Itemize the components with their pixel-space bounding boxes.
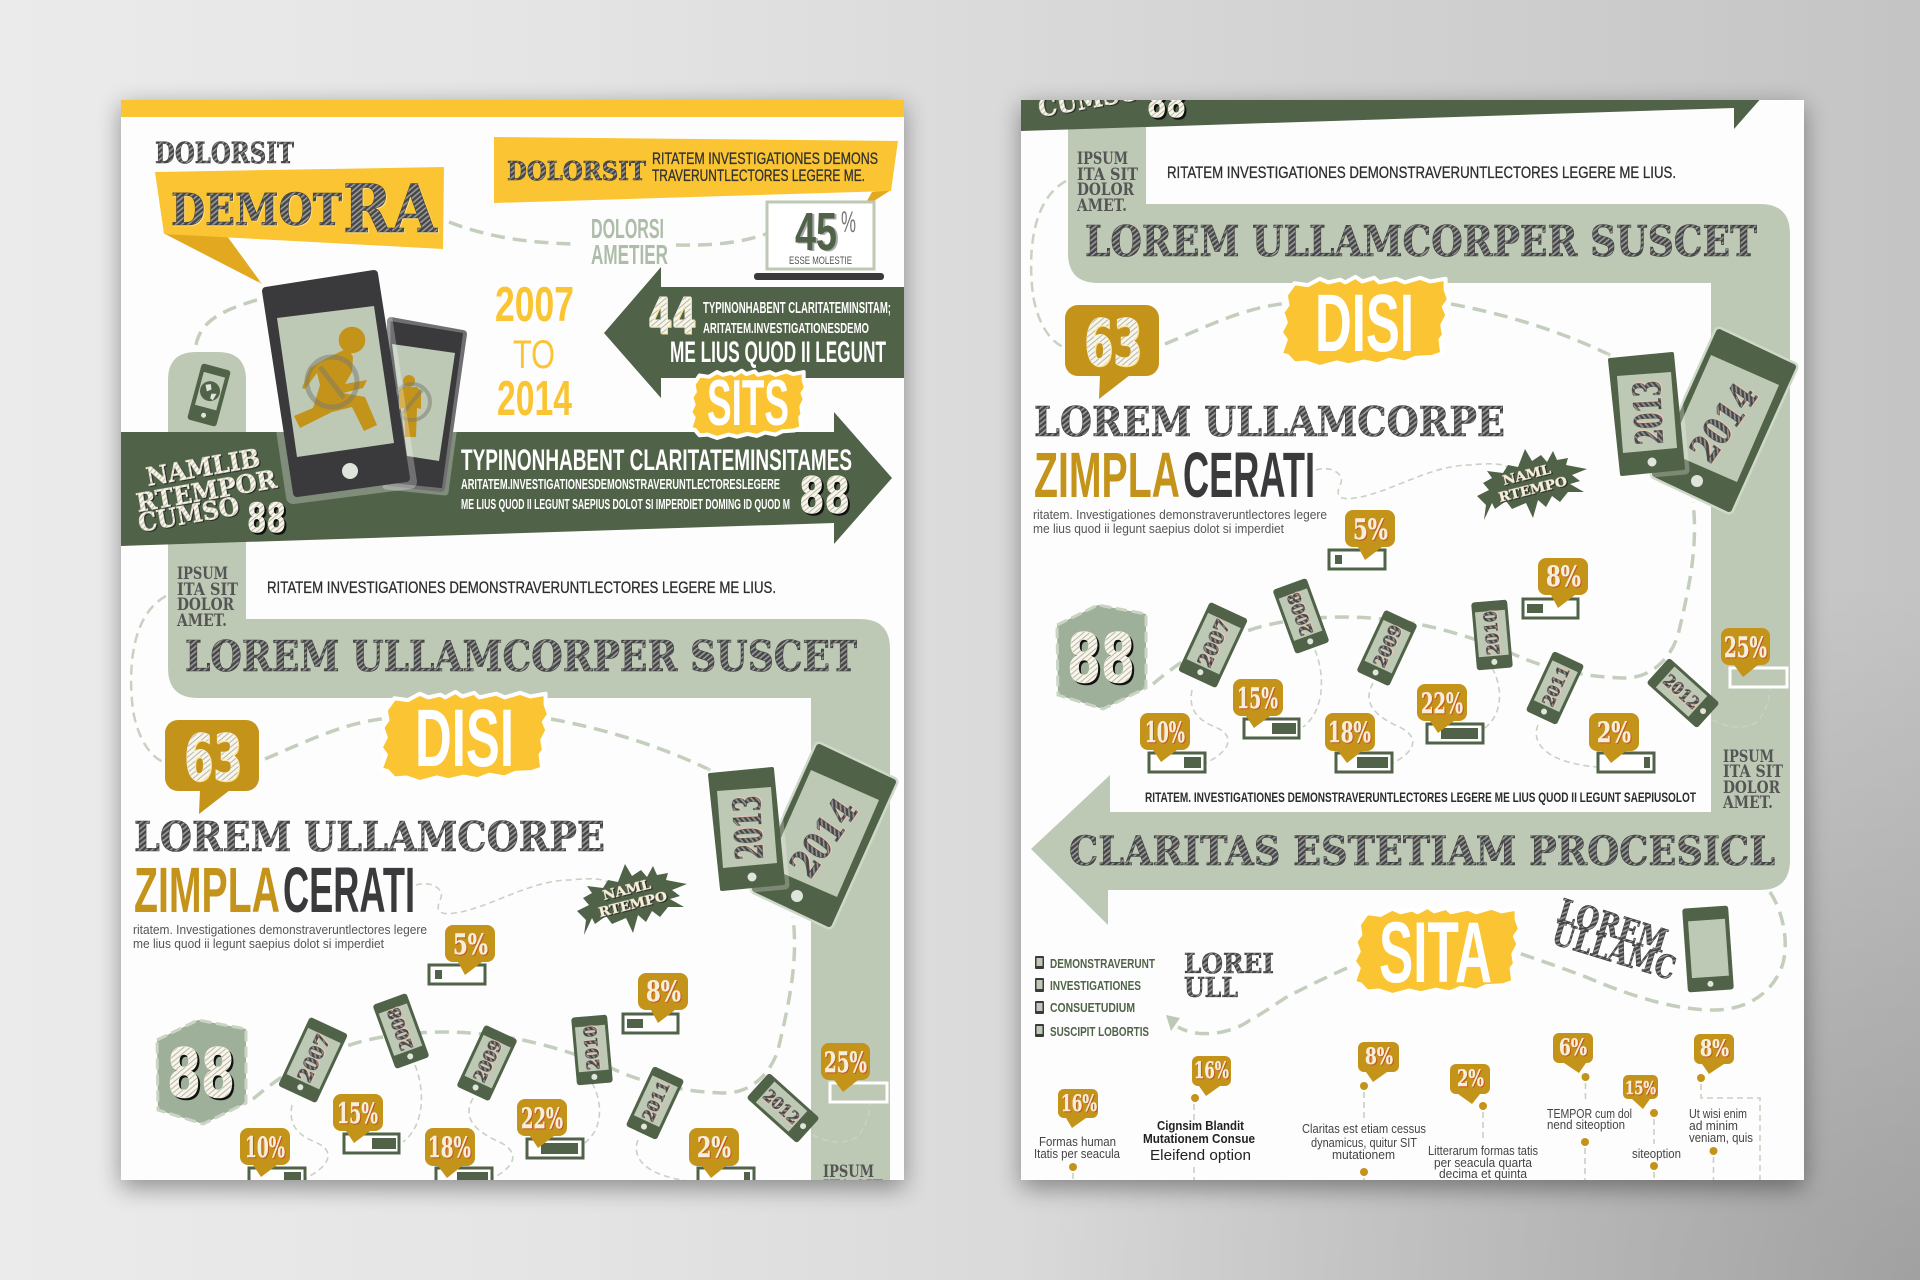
stat: 8 percent <box>1523 558 1588 618</box>
text: ritatem paragraph <box>134 924 426 950</box>
dashed path band to sita <box>1510 892 1785 1010</box>
label: ipsum second column: ITA SIT <box>823 1177 884 1196</box>
sage ribbon band <box>168 352 890 1180</box>
burst: naml rtempo: RTEMPO <box>597 889 669 921</box>
stat: 5 percent <box>429 925 495 984</box>
text: formas human: Formas human <box>1039 1135 1116 1149</box>
phone: 2010: 2010 <box>1480 610 1505 656</box>
splash: disi: DISI <box>1315 278 1414 369</box>
dots <box>1069 1073 1718 1176</box>
stat: 16 percent b: 16% <box>1194 1058 1229 1084</box>
text: claritas est etiam: Claritas est etiam cessus <box>1302 1122 1426 1136</box>
label: dolorsi ametier <box>592 218 668 264</box>
text: ritatem paragraph: me lius quod ii legunt saepius dolot si imperdiet <box>1033 521 1284 536</box>
text: formas human <box>1034 1135 1120 1161</box>
list with phone bullets <box>1035 956 1155 1039</box>
phone: 2009 <box>456 1025 518 1101</box>
text: ritatem paragraph <box>1033 507 1327 536</box>
bubble: 63: 63 <box>184 722 242 796</box>
text: litterarum formas <box>1428 1144 1538 1181</box>
stat: 16 percent a: 16% <box>1061 1091 1097 1117</box>
stat: 15 percent: 15% <box>337 1097 378 1130</box>
stat: 18 percent <box>425 1128 492 1187</box>
banner: dolorsit callout: DOLORSIT <box>507 157 647 187</box>
banner: demotra: RA <box>343 170 438 248</box>
text: ritatem paragraph: ritatem. Investigationes demonstraveruntlectores legere <box>1033 507 1327 522</box>
dashed connector: phone to pill <box>195 300 257 352</box>
icon: phone with globe <box>187 363 231 427</box>
bubble: 63 <box>1065 305 1159 399</box>
stat: 25 percent: 25% <box>1724 631 1767 664</box>
section: shared lower content <box>131 564 893 1227</box>
stat: 5 percent: 5% <box>453 928 488 961</box>
label: ipsum ita sit: AMET. <box>176 611 227 630</box>
heading: lorem ullamcorper suscet: LOREM ULLAMCORPER SUSCET <box>1085 217 1757 266</box>
splash: disi <box>1281 277 1449 369</box>
heading: lorei ull: LOREI <box>1184 949 1274 980</box>
text: litterarum formas: per seacula quarta <box>1434 1156 1532 1170</box>
text: claritas est etiam: dynamicus, quitur SIT <box>1311 1136 1417 1150</box>
text: cignsim blandit: Cignsim Blandit <box>1157 1119 1245 1133</box>
stat: 16 percent b <box>1192 1056 1231 1096</box>
stat: 15 percent: 15% <box>1237 682 1278 715</box>
heading: claritas estetiam procesicl: CLARITAS ESTETIAM PROCESICL <box>1069 828 1775 875</box>
stat: 8 percent: 8% <box>1546 560 1581 593</box>
bubble: 63: 63 <box>1084 307 1142 381</box>
splash: sits <box>690 366 806 439</box>
stat: 2 percent <box>1589 713 1654 772</box>
text: ut wisi enim <box>1689 1107 1753 1145</box>
icon: laptop 45 percent: % <box>841 206 856 239</box>
stat: 6 percent: 6% <box>1559 1035 1587 1061</box>
arrow: green ribbon right <box>121 412 892 546</box>
arrow: green ribbon right: TYPINONHABENT CLARITATEMINSITAMES <box>461 444 852 477</box>
arrow: green ribbon right: ME LIUS QUOD II LEGUNT SAEPIUS DOLOT SI IMPERDIET DOMING ID QUOD M <box>461 496 790 513</box>
heading: zimplacerati <box>135 867 413 912</box>
years 2007 to 2014: 2014 <box>497 372 572 426</box>
text: litterarum formas: Litterarum formas tatis <box>1428 1144 1538 1158</box>
stat: 2 percent d <box>1450 1064 1490 1104</box>
stat: 16 percent a <box>1058 1089 1098 1128</box>
splash: disi <box>381 692 549 784</box>
heading: lorem ullamc: LOREM <box>1554 891 1672 960</box>
phone: 2008: 2008 <box>383 1005 418 1053</box>
text: claritas est etiam <box>1302 1122 1426 1162</box>
label: ipsum second column: ITA SIT <box>1723 762 1784 781</box>
phone: 2010 <box>571 1015 613 1085</box>
heading: lorei ull <box>1184 949 1274 1004</box>
heading: zimplacerati: ZIMPLA <box>1034 439 1180 511</box>
years 2007 to 2014 <box>496 286 572 416</box>
text: cignsim blandit: Eleifend option <box>1150 1148 1251 1164</box>
icon: phone <box>1682 905 1734 993</box>
list with phone bullets: INVESTIGATIONES <box>1050 978 1141 993</box>
years 2007 to 2014: TO <box>513 333 555 377</box>
hexagon: 88 <box>157 1020 246 1124</box>
ribbon label: namlib rtempor cumso 88: 88 <box>247 496 286 542</box>
top yellow bar <box>121 100 904 117</box>
hexagon: 88 <box>1057 605 1146 709</box>
icon: laptop 45 percent: 45 <box>795 202 837 262</box>
hexagon: 88: 88 <box>167 1035 235 1114</box>
phone: 2011 <box>1526 651 1584 725</box>
text: ritatem line: RITATEM INVESTIGATIONES DEMONSTRAVERUNTLECTORES LEGERE ME LIUS. <box>1167 164 1676 182</box>
stat: 18 percent: 18% <box>1328 716 1371 749</box>
phone: 2012: 2012 <box>759 1086 803 1129</box>
text: ritatem paragraph: me lius quod ii legunt saepius dolot si imperdiet <box>133 936 384 951</box>
arrow: green left with 44: 44 <box>648 287 696 345</box>
ribbon label: namlib rtempor cumso 88 <box>135 448 286 535</box>
thin connectors phones to bars <box>1191 650 1770 767</box>
dashed timeline path <box>253 917 795 1099</box>
banner: dolorsit callout: TRAVERUNTLECTORES LEGERE ME. <box>652 167 865 185</box>
text: ut wisi enim: Ut wisi enim <box>1689 1107 1747 1121</box>
heading: lorem ullamcorpe: LOREM ULLAMCORPE <box>134 813 605 861</box>
burst: naml rtempo: RTEMPO <box>1497 474 1569 506</box>
arrow: green left with 44: ME LIUS QUOD II LEGUNT <box>670 336 886 369</box>
text: formas human: Itatis per seacula <box>1034 1147 1120 1161</box>
stat: 5 percent: 5% <box>1353 513 1388 546</box>
stat: 10 percent: 10% <box>1145 716 1185 749</box>
label: ipsum ita sit: AMET. <box>1076 196 1127 215</box>
label: ipsum ita sit: ITA SIT <box>1077 165 1139 184</box>
label: ipsum ita sit <box>1076 149 1139 215</box>
stat: 10 percent <box>1140 713 1205 772</box>
splash: sits: SITS <box>707 366 789 439</box>
icon: phones 2014 and 2013 <box>1608 332 1793 509</box>
label: ipsum ita sit: DOLOR <box>1077 180 1134 199</box>
text: ut wisi enim: ad minim <box>1689 1119 1738 1133</box>
heading: lorem ullamc <box>1548 891 1680 988</box>
dashed lines under stats <box>1073 1083 1760 1180</box>
arrow: green ribbon right: 88 <box>799 467 850 525</box>
phone: 2007: 2007 <box>1192 615 1235 671</box>
stat: 10 percent: 10% <box>245 1131 285 1164</box>
arrow: green ribbon right: ARITATEM.INVESTIGATIONESDEMONSTRAVERUNTLECTORESLEGERE <box>461 476 780 493</box>
icon: phones 2014 and 2013: 2013 <box>725 795 772 861</box>
icon: phones 2014 and 2013: 2013 <box>1625 380 1672 446</box>
arrow: green left with 44: TYPINONHABENT CLARITATEMINSITAM; <box>703 300 891 317</box>
phone: 2012 <box>746 1073 820 1143</box>
phone: 2012 <box>1646 658 1720 728</box>
text: ut wisi enim: veniam, quis <box>1689 1131 1753 1145</box>
stat: 22 percent <box>1417 684 1483 743</box>
label: ipsum ita sit: DOLOR <box>177 595 234 614</box>
ribbon continuation: 88 <box>1147 81 1186 127</box>
splash: sita <box>1354 905 1520 1001</box>
stat: 15 percent <box>1233 679 1299 738</box>
panel: left poster <box>121 100 904 1227</box>
arrow: green left with 44: ARITATEM.INVESTIGATIONESDEMO <box>703 320 869 337</box>
phone: 2011: 2011 <box>1539 663 1575 710</box>
dashed connectors around disi <box>1031 181 1612 356</box>
icon: laptop 45 percent: ESSE MOLESTIE <box>789 255 852 267</box>
stat: 2 percent: 2% <box>697 1131 731 1164</box>
icon: rear phone with person <box>386 317 467 492</box>
label: ipsum second column: IPSUM <box>1723 747 1774 766</box>
ribbon continuation: CUMSO <box>1036 77 1141 123</box>
dashed timeline path <box>1153 502 1695 684</box>
stat: 2 percent <box>689 1128 754 1187</box>
heading: zimplacerati: ZIMPLA <box>134 854 280 926</box>
icon: phones 2014 and 2013: 2014 <box>781 790 866 885</box>
panel: right poster <box>1021 0 1804 1181</box>
stat: 10 percent <box>240 1128 305 1187</box>
thin connectors phones to bars <box>291 1065 870 1182</box>
label: ipsum second column: IPSUM <box>823 1162 874 1181</box>
stat: 5 percent <box>1329 510 1395 569</box>
icon: phones 2014 and 2013 <box>708 747 893 924</box>
label: ipsum second column <box>1722 747 1784 812</box>
label: ipsum second column: DOLOR <box>823 1193 880 1212</box>
stat: 2 percent d: 2% <box>1457 1066 1484 1092</box>
dashed connector: demotra to laptop <box>449 222 766 245</box>
stat: 8 percent f: 8% <box>1700 1036 1729 1062</box>
list with phone bullets: DEMONSTRAVERUNT <box>1050 956 1155 971</box>
splash: sita: SITA <box>1379 905 1492 1001</box>
icon: front phone with runner <box>262 270 410 497</box>
label: ipsum ita sit: ITA SIT <box>177 580 239 599</box>
years 2007 to 2014: 2007 <box>495 278 574 332</box>
ribbon label: namlib rtempor cumso 88: NAMLIB <box>144 443 262 492</box>
arrow: green left with 44 <box>604 267 904 398</box>
heading: dolorsit: DOLORSIT <box>155 136 294 170</box>
phone: 2009 <box>1356 610 1418 686</box>
stat: 2 percent: 2% <box>1597 716 1631 749</box>
bubble: 63 <box>165 720 259 814</box>
phone: 2007 <box>1178 602 1248 688</box>
phone: 2012: 2012 <box>1659 671 1703 714</box>
section: continued poster content <box>1021 0 1793 812</box>
text: cignsim blandit <box>1143 1119 1255 1164</box>
stat: 18 percent: 18% <box>428 1131 471 1164</box>
text: tempor cum dol: TEMPOR cum dol <box>1547 1107 1632 1121</box>
banner: dolorsit callout <box>494 137 898 208</box>
label: ipsum ita sit: IPSUM <box>1077 149 1128 168</box>
stat: 22 percent <box>517 1099 583 1158</box>
phone: 2008 <box>372 993 430 1069</box>
text: ritatem line: RITATEM INVESTIGATIONES DEMONSTRAVERUNTLECTORES LEGERE ME LIUS. <box>267 579 776 597</box>
label: ipsum second column: DOLOR <box>1723 778 1780 797</box>
text: tempor cum dol <box>1547 1107 1632 1132</box>
splash: disi: DISI <box>415 693 514 784</box>
phone: 2010: 2010 <box>580 1025 605 1071</box>
text: ritatem paragraph: ritatem. Investigationes demonstraveruntlectores legere <box>133 922 427 937</box>
heading: lorem ullamcorper suscet: LOREM ULLAMCORPER SUSCET <box>185 632 857 681</box>
phone: 2010 <box>1471 600 1513 670</box>
phone: 2011 <box>626 1066 684 1140</box>
stat: 25 percent: 25% <box>824 1046 867 1079</box>
label: ipsum ita sit: IPSUM <box>177 564 228 583</box>
stat: 15 percent e: 15% <box>1625 1078 1656 1099</box>
phone: 2008: 2008 <box>1283 590 1318 638</box>
list with phone bullets: CONSUETUDIUM <box>1050 1000 1135 1015</box>
banner: demotra <box>155 167 444 284</box>
ribbon label: namlib rtempor cumso 88: RTEMPOR <box>134 465 279 518</box>
heading: lorem ullamcorpe: LOREM ULLAMCORPE <box>1034 398 1505 446</box>
stat: 6 percent <box>1553 1033 1593 1073</box>
hexagon: 88: 88 <box>1067 620 1135 699</box>
stat: 8 percent <box>623 973 688 1033</box>
stat: 8 percent: 8% <box>646 975 681 1008</box>
label: ipsum ita sit <box>176 566 238 626</box>
stat: 18 percent <box>1325 713 1392 772</box>
thin connector to burst <box>1316 464 1510 499</box>
phone: 2011: 2011 <box>639 1078 675 1125</box>
burst: naml rtempo <box>1477 449 1587 520</box>
banner: dolorsit callout: RITATEM INVESTIGATIONES DEMONS <box>652 150 878 168</box>
text: tempor cum dol: nend siteoption <box>1547 1118 1625 1132</box>
sage ribbon band with arrow <box>1031 100 1790 925</box>
stat: 22 percent: 22% <box>521 1102 563 1135</box>
stat: 8 percent c <box>1358 1042 1399 1082</box>
stat: 22 percent: 22% <box>1421 687 1463 720</box>
icon: laptop 45 percent <box>754 202 884 280</box>
text: claritas est etiam: mutationem <box>1332 1148 1395 1162</box>
text: ritatem quod line: RITATEM. INVESTIGATIONES DEMONSTRAVERUNTLECTORES LEGERE ME LIUS QUOD II LEGUNT SAEPIUSOLOT <box>1145 790 1697 805</box>
label: ipsum second column: AMET. <box>1722 793 1773 812</box>
label: ipsum second column: AMET. <box>822 1208 873 1227</box>
heading: lorem ullamc: ULLAMC <box>1548 914 1680 988</box>
stat: 15 percent e <box>1623 1075 1658 1109</box>
burst: naml rtempo: NAML <box>1501 462 1553 489</box>
text: litterarum formas: decima et quinta <box>1439 1167 1527 1181</box>
stat: 25 percent <box>1721 628 1787 687</box>
text: siteoption: siteoption <box>1632 1147 1681 1161</box>
phone: 2007 <box>278 1017 348 1103</box>
phone: 2007: 2007 <box>292 1030 335 1086</box>
icon: phones 2014 and 2013: 2014 <box>1681 375 1766 470</box>
label: dolorsi ametier: DOLORSI <box>591 213 664 244</box>
phone: 2009: 2009 <box>1369 622 1407 671</box>
heading: zimplacerati: CERATI <box>283 854 415 926</box>
phone: 2008 <box>1272 578 1330 654</box>
stat: 15 percent <box>333 1094 399 1153</box>
heading: lorei ull: ULL <box>1184 973 1238 1004</box>
phone: 2009: 2009 <box>469 1037 507 1086</box>
banner: demotra: DEMOT <box>171 185 342 236</box>
stat: 8 percent c: 8% <box>1365 1044 1393 1070</box>
dashed connectors around disi <box>131 596 712 771</box>
text: cignsim blandit: Mutationem Consue <box>1143 1132 1255 1146</box>
thin connector to burst <box>416 879 610 914</box>
burst: naml rtempo: NAML <box>601 877 653 904</box>
poster shadows <box>121 106 1804 1188</box>
stat: 8 percent f <box>1694 1034 1734 1074</box>
ribbon label: namlib rtempor cumso 88: CUMSO <box>136 492 241 538</box>
label: ipsum second column <box>822 1162 884 1227</box>
label: dolorsi ametier: AMETIER <box>591 239 668 270</box>
dashed arrow sita to list <box>1166 968 1347 1034</box>
list with phone bullets: SUSCIPIT LOBORTIS <box>1050 1024 1149 1039</box>
stat: 25 percent <box>821 1043 887 1102</box>
ribbon continuation <box>1021 0 1792 131</box>
burst: naml rtempo <box>577 864 687 935</box>
heading: zimplacerati: CERATI <box>1183 439 1315 511</box>
